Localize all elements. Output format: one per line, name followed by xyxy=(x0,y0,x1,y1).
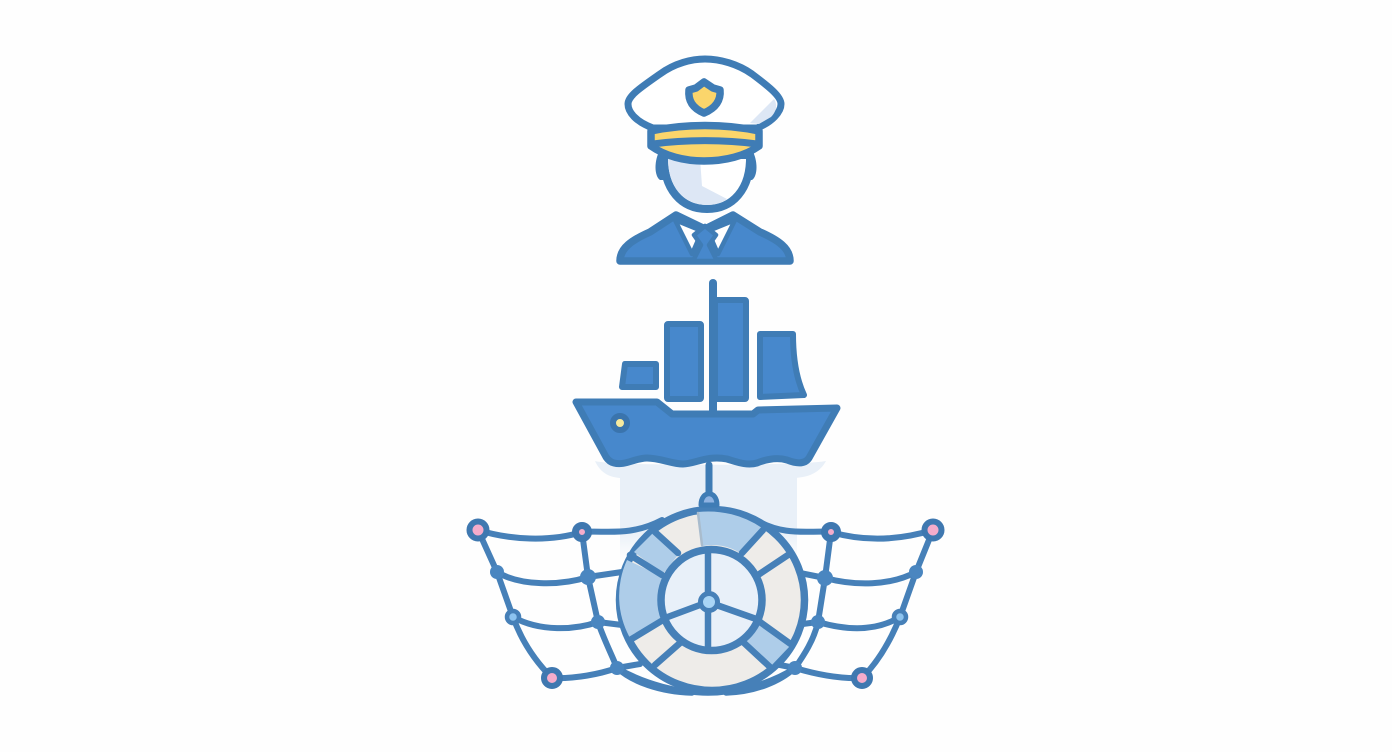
icon: captain xyxy=(620,59,790,261)
tow rope and hook xyxy=(701,465,717,505)
net right side lines xyxy=(756,520,933,678)
inner wheel disc xyxy=(661,550,762,650)
body and jacket xyxy=(620,215,790,261)
wheel spokes xyxy=(665,553,759,649)
mast xyxy=(709,283,717,414)
cargo container centre tall xyxy=(715,300,746,399)
water glow behind the ship xyxy=(595,461,826,560)
net left side lines xyxy=(478,520,662,678)
cap band and visor xyxy=(651,126,759,161)
cap badge xyxy=(689,82,720,113)
light blue knots xyxy=(507,611,906,623)
net lines crossing under the wheel xyxy=(617,668,795,693)
seam on the top segment xyxy=(698,513,702,545)
wheel hub xyxy=(700,594,718,610)
head and face xyxy=(656,150,756,209)
net knots xyxy=(470,522,942,686)
pink corner knots xyxy=(470,522,942,686)
icon: safety net xyxy=(478,520,933,678)
ring dividers xyxy=(630,530,792,667)
icon: lifebuoy wheel xyxy=(619,465,804,690)
icon: ship xyxy=(576,283,837,464)
solid knots xyxy=(490,565,923,675)
porthole xyxy=(613,416,627,430)
light blue ring segments xyxy=(619,511,790,667)
hull xyxy=(576,402,837,464)
cargo container left small xyxy=(622,364,656,387)
funnel right xyxy=(760,334,804,397)
necktie xyxy=(693,226,717,261)
cargo container left tall xyxy=(667,324,701,399)
cap crown xyxy=(628,59,781,128)
ring base xyxy=(620,510,804,690)
